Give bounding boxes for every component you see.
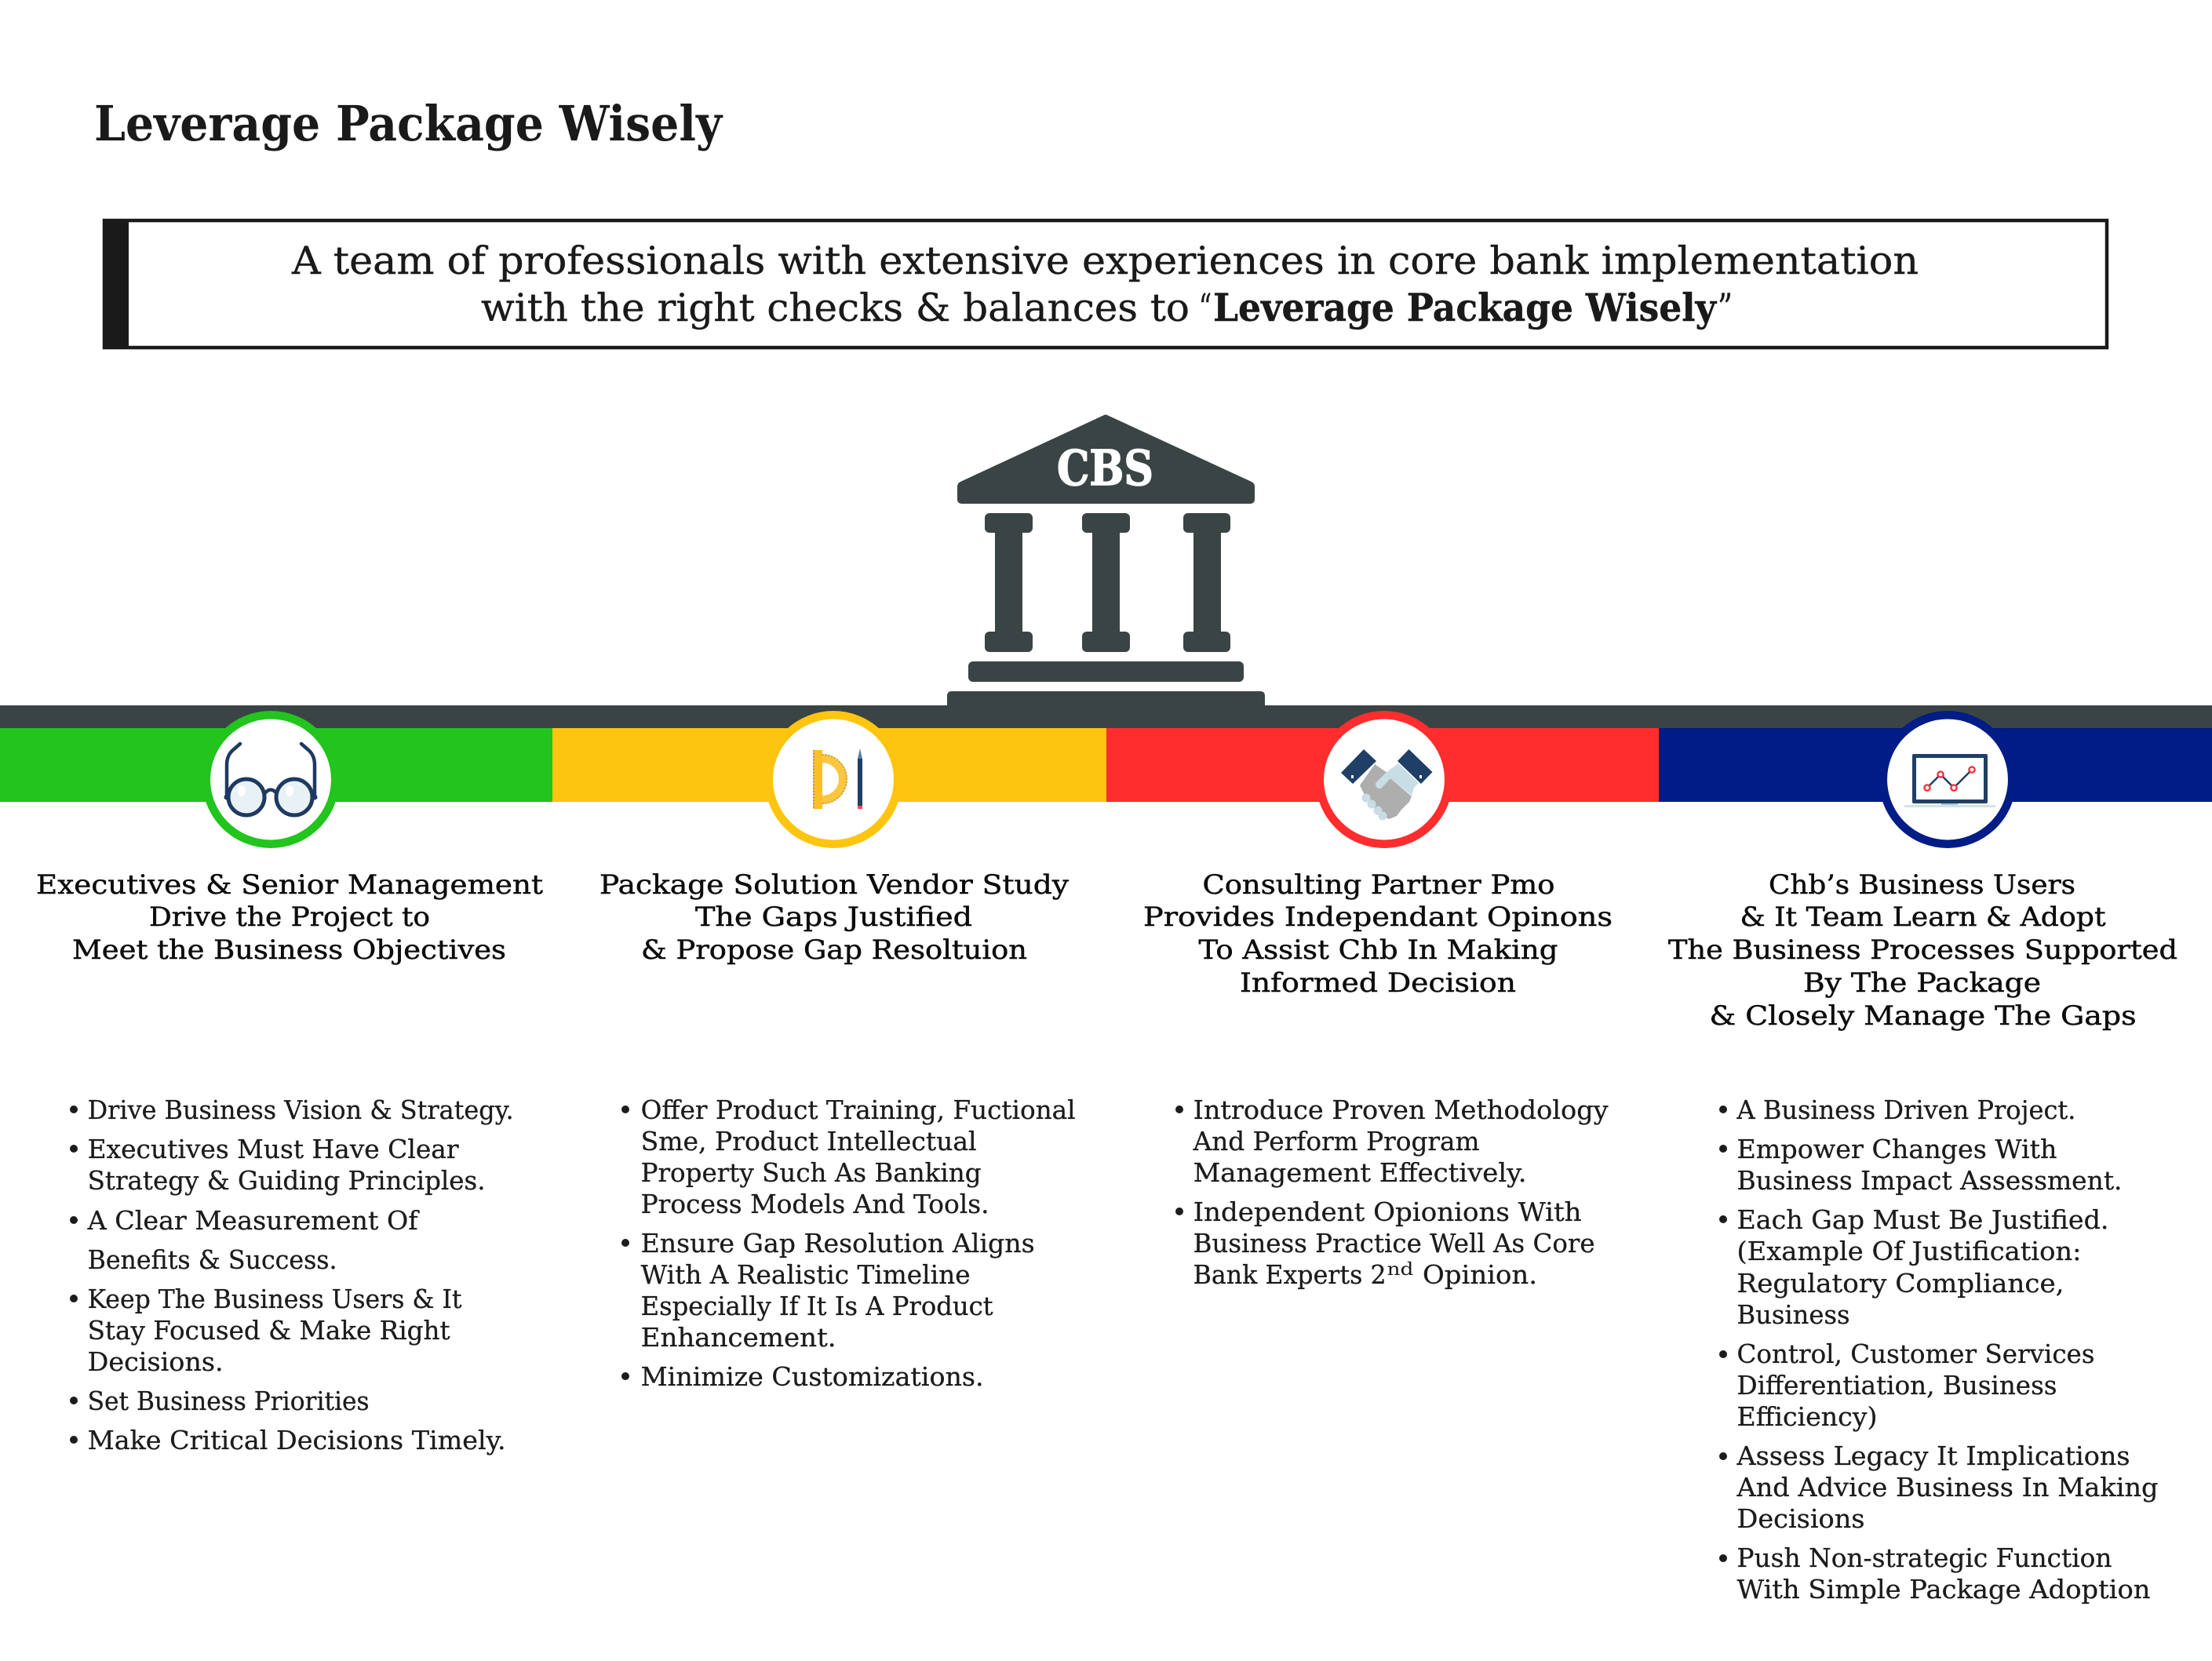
icon: bank building CBS: CBS	[1057, 439, 1153, 497]
bullet list: executives: Keep The Business Users & It	[88, 1284, 462, 1314]
icon: handshake	[1320, 715, 1449, 844]
bullet list: executives: Benefits & Success.	[88, 1244, 337, 1275]
bullet list: consulting partner: Opinion.	[1423, 1259, 1537, 1290]
callout text: A team of professionals with extensive experiences in core bank implementation	[291, 239, 1919, 283]
heading: consulting partner: To Assist Chb In Making	[1199, 934, 1558, 966]
panel: business users	[1668, 869, 2177, 1605]
bullet list: business users: (Example Of Justification:	[1737, 1236, 2081, 1266]
callout: mission statement box	[103, 219, 2107, 349]
callout text: with the right checks & balances to	[481, 286, 1190, 330]
icon: laptop chart	[1883, 715, 2012, 844]
bullet list: consulting partner: Bank Experts 2	[1193, 1259, 1387, 1290]
bullet list: business users: A Business Driven Project.	[1736, 1095, 2076, 1125]
bullet list: package vendor: Minimize Customizations.	[641, 1361, 984, 1392]
bullet list: package vendor: Offer Product Training, Fuctional	[641, 1095, 1076, 1125]
bullet list: business users: Control, Customer Services	[1737, 1339, 2095, 1369]
heading: consulting partner: Consulting Partner Pmo	[1202, 869, 1555, 901]
bullet list: business users: Each Gap Must Be Justified.	[1737, 1204, 2109, 1235]
callout text: ”	[1718, 286, 1733, 330]
heading: business users: & It Team Learn & Adopt	[1740, 902, 2106, 933]
heading: business users: Chb’s Business Users	[1769, 869, 2075, 901]
bullet list: business users: Efficiency)	[1737, 1401, 1877, 1432]
bullet list: package vendor: Ensure Gap Resolution Aligns	[641, 1228, 1035, 1258]
callout text: “	[1199, 286, 1212, 330]
heading: business users: The Business Processes Supported	[1668, 934, 2177, 966]
panel: consulting partner	[1143, 869, 1613, 1290]
bullet list: consulting partner: Independent Opionions With	[1193, 1197, 1582, 1227]
bullet list: business users: And Advice Business In Making	[1736, 1472, 2158, 1503]
bullet list: business users: Empower Changes With	[1737, 1134, 2057, 1164]
panel: executives	[36, 869, 543, 1455]
bullet list: business users: Business	[1737, 1299, 1850, 1330]
bullet list: consulting partner: Management Effectively.	[1193, 1157, 1527, 1188]
heading: consulting partner	[1143, 869, 1613, 999]
bullet list: executives: Drive Business Vision & Strategy.	[88, 1095, 514, 1125]
icon: ruler protractor and pencil	[769, 715, 898, 844]
heading: executives: Meet the Business Objectives	[72, 934, 506, 966]
bullet list: package vendor: With A Realistic Timeline	[641, 1259, 971, 1290]
callout text: Leverage Package Wisely	[1213, 285, 1717, 330]
bullet list: consulting partner: And Perform Program	[1193, 1126, 1480, 1157]
bullet list: package vendor: Especially If It Is A Product	[641, 1291, 993, 1321]
bullet list: business users: Business Impact Assessment.	[1737, 1165, 2122, 1196]
heading: business users	[1668, 869, 2177, 1032]
bullet list: business users: Assess Legacy It Implications	[1736, 1441, 2130, 1471]
bullet list: executives: Set Business Priorities	[88, 1386, 370, 1416]
heading: business users: & Closely Manage The Gaps	[1709, 1000, 2136, 1032]
bullet list: executives: Decisions.	[88, 1346, 224, 1377]
bullet list: consulting partner: Business Practice Well As Core	[1193, 1228, 1595, 1258]
bullet list: executives	[70, 1095, 514, 1455]
bullet list: business users: With Simple Package Adoption	[1737, 1574, 2150, 1605]
bullet list: package vendor: Property Such As Banking	[641, 1157, 982, 1188]
bullet list: package vendor: Sme, Product Intellectual	[641, 1126, 977, 1157]
bullet list: business users: Differentiation, Business	[1737, 1370, 2057, 1401]
bullet list: executives: A Clear Measurement Of	[87, 1205, 420, 1236]
bullet list: executives: Make Critical Decisions Timely.	[88, 1425, 506, 1455]
heading: executives	[36, 869, 543, 966]
bullet list: executives: Executives Must Have Clear	[88, 1134, 459, 1164]
bullet list: consulting partner: Introduce Proven Methodology	[1193, 1095, 1609, 1125]
heading: consulting partner: Informed Decision	[1240, 967, 1516, 999]
bullet list: business users	[1719, 1095, 2158, 1605]
bullet list: business users: Decisions	[1737, 1503, 1864, 1534]
heading: package vendor: Package Solution Vendor Study	[599, 869, 1070, 901]
bullet list: package vendor: Process Models And Tools.	[641, 1189, 989, 1219]
panel: package vendor	[599, 869, 1076, 1392]
bullet list: package vendor: Enhancement.	[641, 1322, 836, 1353]
heading: executives: Drive the Project to	[149, 902, 430, 933]
icon: bank building CBS	[947, 414, 1265, 706]
title: Leverage Package Wisely	[94, 95, 723, 152]
bullet list: consulting partner	[1175, 1095, 1609, 1290]
callout text	[291, 239, 1919, 330]
bullet list: executives: Stay Focused & Make Right	[88, 1315, 450, 1346]
colour band	[0, 705, 2212, 802]
heading: package vendor	[599, 869, 1070, 966]
heading: business users: By The Package	[1803, 967, 2041, 999]
icon: glasses	[206, 715, 335, 844]
bullet list: business users: Regulatory Compliance,	[1737, 1268, 2064, 1299]
bullet list: business users: Push Non-strategic Function	[1737, 1543, 2112, 1573]
bullet list: consulting partner: nd	[1387, 1260, 1414, 1280]
bullet list: executives: Strategy & Guiding Principles.	[88, 1165, 486, 1196]
heading: executives: Executives & Senior Management	[36, 869, 543, 901]
heading: package vendor: The Gaps Justified	[695, 902, 972, 933]
bullet list: package vendor	[621, 1095, 1076, 1392]
heading: package vendor: & Propose Gap Resoltuion	[641, 934, 1027, 966]
heading: consulting partner: Provides Independant Opinons	[1143, 902, 1613, 933]
